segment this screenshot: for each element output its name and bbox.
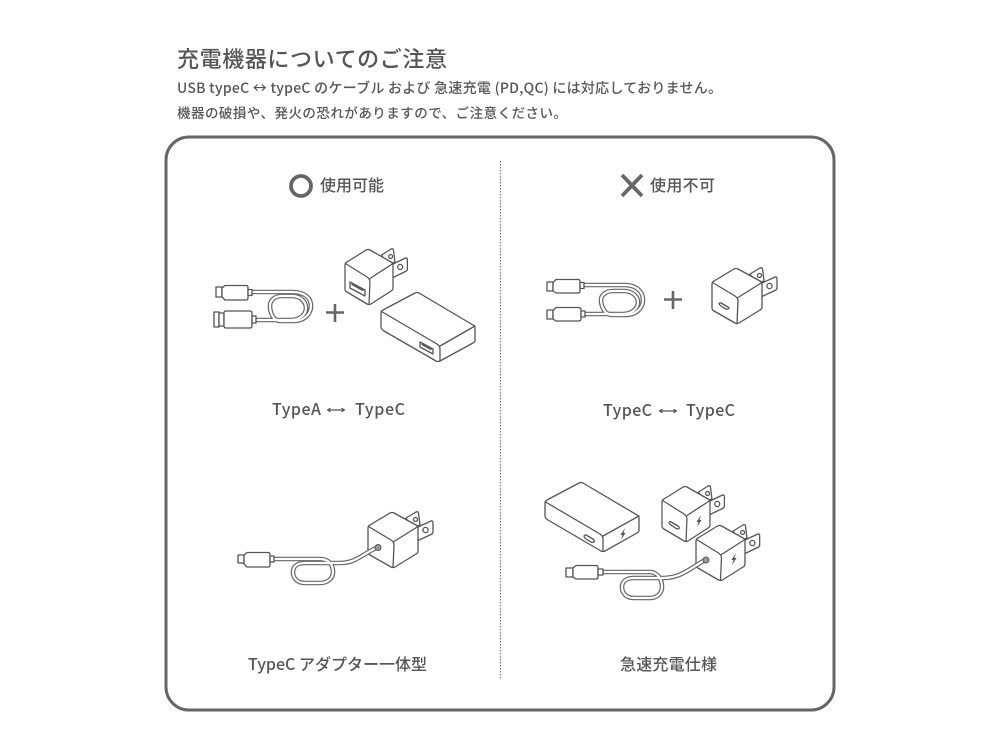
- heading: usable: 使用可能: [320, 172, 384, 196]
- illustration: fast-charge cable adapter: [566, 525, 760, 598]
- heading: usable: [291, 172, 384, 196]
- label: TypeC to TypeC: TypeC: [603, 397, 652, 421]
- icon: plus: [664, 291, 682, 309]
- illustration: TypeA to TypeC cable: [214, 286, 311, 328]
- label: TypeA to TypeC: TypeA: [272, 396, 321, 420]
- illustration: USB-A power bank: [381, 292, 475, 362]
- label: TypeA to TypeC: [272, 396, 405, 420]
- heading: not usable: 使用不可: [650, 172, 715, 196]
- label: TypeC to TypeC: TypeC: [686, 397, 735, 421]
- illustration: USB-A adapter: [345, 249, 407, 304]
- illustration: fast-charge power bank: [545, 482, 639, 552]
- panel: compatibility frame: [166, 137, 834, 710]
- illustration: USB-C adapter: [712, 268, 777, 324]
- illustration: TypeC to TypeC cable: [547, 280, 643, 321]
- label: TypeA to TypeC: TypeC: [355, 396, 405, 420]
- notice text line 2: 機器の破損や、発火の恐れがありますので、ご注意ください。: [177, 102, 567, 122]
- illustration: fast-charge adapter: [662, 486, 724, 542]
- illustration: TypeC integrated adapter: [238, 512, 433, 583]
- label: fast charge: 急速充電仕様: [620, 651, 717, 675]
- notice text line 1: USB typeC ↔ typeC のケーブル および 急速充電 (PD,QC) には対応しておりません。: [177, 78, 722, 98]
- title: 充電機器についてのご注意: [177, 42, 447, 74]
- label: TypeC integrated adapter: TypeC アダプター一体型: [248, 651, 427, 675]
- heading: not usable: [622, 172, 715, 196]
- icon: plus: [326, 304, 344, 322]
- label: TypeC to TypeC: [603, 397, 735, 421]
